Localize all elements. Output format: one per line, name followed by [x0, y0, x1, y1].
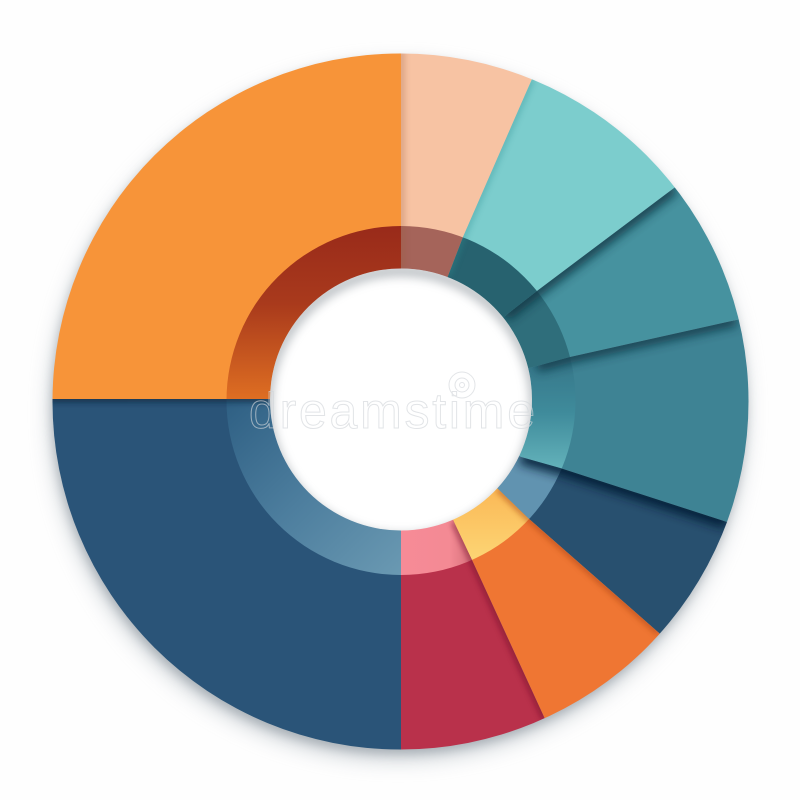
watermark — [249, 372, 535, 439]
shadow on mid teal — [505, 188, 674, 316]
shadow on light teal — [448, 79, 532, 276]
watermark text: dreamstime — [249, 383, 535, 439]
watermark logo — [449, 372, 475, 398]
inner ring band — [226, 226, 574, 575]
ring: dark orange — [226, 226, 401, 399]
shadow on deep teal — [537, 320, 736, 366]
center hole — [267, 268, 535, 539]
ring: mid teal — [504, 291, 570, 368]
segment: dark orange — [453, 488, 660, 718]
segment: crimson — [401, 520, 544, 750]
shadow on crimson — [454, 522, 545, 719]
shadow on small navy — [521, 457, 727, 522]
ring: light teal — [448, 237, 537, 318]
shadow on large navy — [50, 396, 270, 402]
segment: deep teal — [520, 320, 748, 522]
outer drop shadow — [51, 60, 746, 759]
segment edge shadows — [50, 50, 736, 719]
segment: large navy — [52, 399, 401, 750]
shadow on dark orange — [498, 489, 659, 633]
shadow on peach — [401, 54, 407, 226]
ring: yellow — [453, 488, 529, 560]
donut segments — [52, 54, 748, 750]
ring: pink — [401, 520, 472, 575]
segment: small navy — [498, 456, 727, 634]
ring: small navy — [497, 456, 562, 519]
ring: peach — [401, 226, 463, 277]
segment: light teal — [448, 79, 675, 291]
segment: peach — [401, 54, 532, 274]
ring: deep teal — [519, 366, 574, 468]
ring: large navy — [226, 399, 401, 575]
segment: mid teal — [504, 188, 739, 368]
segment: orange — [52, 54, 401, 399]
